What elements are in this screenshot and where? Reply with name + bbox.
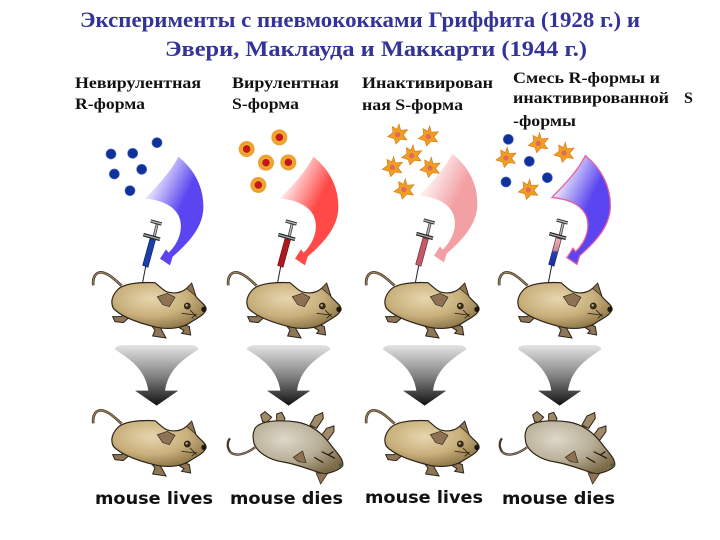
column 4: dead mouse [500, 412, 615, 484]
label: avirulent R-form [75, 75, 201, 113]
column 3: syringe [415, 220, 435, 283]
column 1: curved arrow [145, 157, 203, 265]
column 4: mixed bacteria [496, 133, 574, 199]
column 1: syringe [142, 221, 162, 284]
column 3: result: mouse lives [365, 488, 483, 508]
column 2: down arrow [247, 345, 330, 406]
column 2: dead mouse [228, 412, 343, 484]
title: Эвери, Маклауда и Маккарти (1944 г.) [165, 36, 587, 61]
label: inactivated S-form: ная S-форма [362, 97, 463, 114]
column 2: syringe [277, 221, 297, 284]
column 3: down arrow [383, 345, 466, 406]
column 4: syringe [548, 220, 568, 283]
label: avirulent R-form: R-форма [75, 96, 145, 113]
label: virulent S-form: S-форма [232, 96, 299, 113]
title [80, 7, 640, 61]
label: mixture [513, 70, 693, 130]
column 2: result: mouse dies [230, 489, 343, 509]
column 1: living mouse [93, 410, 207, 476]
column 1: injected mouse [93, 272, 207, 338]
column 3: injected mouse [366, 272, 480, 338]
label: virulent S-form: Вирулентная [232, 75, 339, 92]
column 2: injected mouse [228, 272, 342, 338]
column 2: curved arrow [280, 157, 338, 265]
column 4: curved arrow [552, 156, 610, 264]
label: avirulent R-form: Невирулентная [75, 75, 201, 92]
column 3: living mouse [366, 410, 480, 476]
title: Эксперименты с пневмококками Гриффита (1928 г.) и [80, 7, 640, 32]
column 4: result: mouse dies [502, 489, 615, 509]
label: mixture: S [684, 90, 693, 107]
column 1: down arrow [115, 345, 198, 406]
column 4: down arrow [518, 345, 601, 406]
label: mixture: -формы [513, 113, 577, 130]
column 1: result: mouse lives [95, 489, 213, 509]
label: inactivated S-form [362, 75, 493, 114]
column 3: killed S-form bacteria [382, 124, 440, 199]
column 3: curved arrow [419, 154, 477, 262]
label: inactivated S-form: Инактивирован [362, 75, 493, 92]
column 2: S-form bacteria [239, 129, 296, 193]
label: virulent S-form [232, 75, 339, 113]
column 1: R-form bacteria [106, 138, 162, 196]
column 4: injected mouse [499, 272, 613, 338]
label: mixture: инактивированной [513, 90, 669, 107]
label: mixture: Смесь R-формы и [513, 70, 660, 87]
